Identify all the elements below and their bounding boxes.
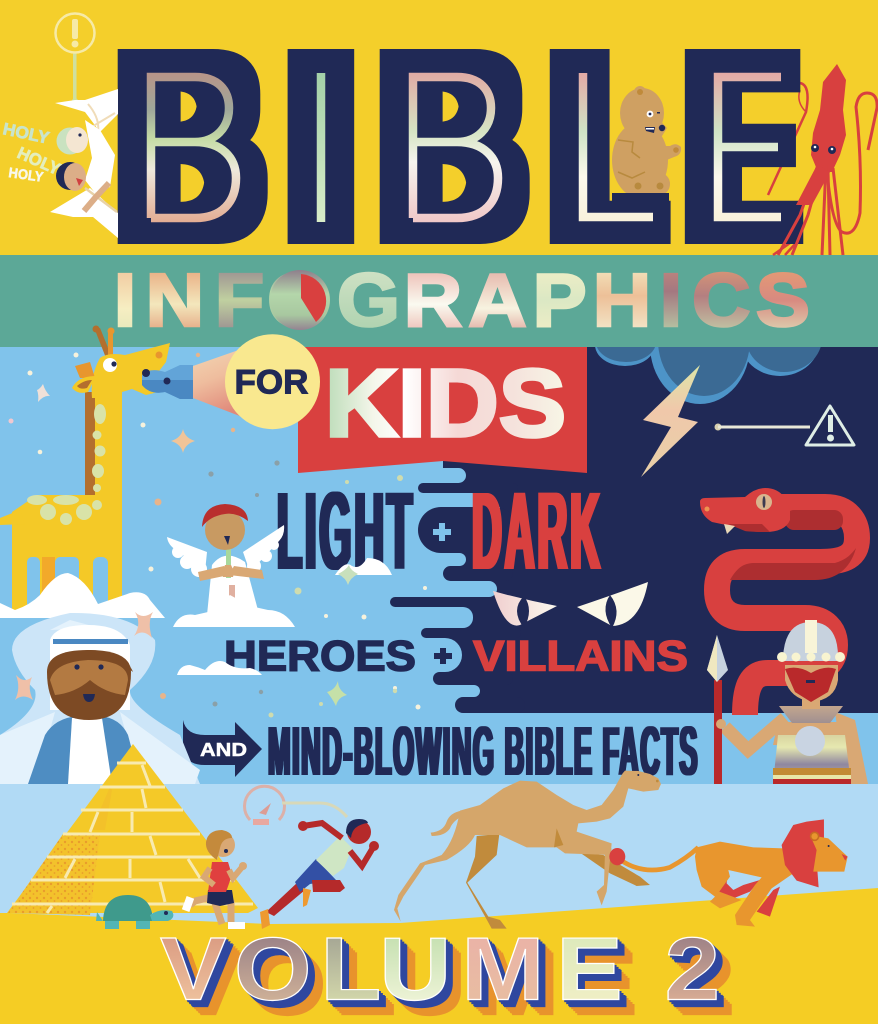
small cloud by LIGHT <box>335 558 392 575</box>
icon: bear <box>612 86 681 198</box>
panel: teal band <box>0 255 878 347</box>
panel: dark half with wavy edge <box>300 347 878 713</box>
title: INFOGRAPHICS: I <box>660 258 682 342</box>
icon: storm cloud <box>595 347 820 404</box>
icon: pie chart in the O <box>270 270 330 330</box>
icon: villain cat eyes <box>493 582 648 628</box>
icon: plus dark <box>434 648 452 664</box>
decorative gradient inline strokes of the title <box>151 73 781 222</box>
title: BIBLE: E <box>693 0 791 293</box>
text: DARK <box>472 470 603 593</box>
panel: red banner <box>298 347 587 473</box>
title: VOLUME 2: V <box>160 919 227 1019</box>
circle badge: FOR: FOR <box>234 364 308 402</box>
text: HOLY 3: HOLY <box>8 164 45 185</box>
heading: HEROES: HEROES <box>224 632 416 680</box>
icon: tentacles behind title <box>768 83 808 255</box>
arrow with AND: AND <box>200 740 247 760</box>
icon: turtle <box>96 895 173 929</box>
icon: praising angels <box>50 89 118 238</box>
title: INFOGRAPHICS: A <box>468 258 527 342</box>
icon: speedometer <box>245 786 347 825</box>
icon: squid <box>778 64 877 255</box>
arrow with AND <box>183 720 262 777</box>
cloud under angel <box>173 595 295 627</box>
title: BIBLE: L <box>557 0 658 293</box>
icon: pyramid <box>7 744 258 915</box>
text: LIGHT <box>277 470 415 593</box>
text: HOLY 1: HOLY <box>1 119 52 148</box>
title: VOLUME 2: E <box>556 919 623 1019</box>
title: INFOGRAPHICS: P <box>533 258 587 342</box>
circle badge: FOR <box>225 334 320 429</box>
title: INFOGRAPHICS: I <box>114 258 136 342</box>
text: HOLY 2: HOLY <box>14 143 64 179</box>
title: BIBLE <box>123 0 791 293</box>
icon: singing angel <box>167 504 284 625</box>
icon: camel <box>394 771 661 929</box>
small cloud by HEROES <box>177 661 262 675</box>
icon: giraffe <box>0 326 170 617</box>
icon: pen flashlight with beam <box>142 346 250 420</box>
icon: Moses with glow <box>0 613 200 784</box>
icon: sprinter <box>260 819 379 929</box>
title: INFOGRAPHICS: G <box>337 258 400 342</box>
title: INFOGRAPHICS: R <box>404 258 462 342</box>
icon: lightning bolt <box>641 365 700 477</box>
icon: exclamation circle with stem <box>56 14 94 104</box>
title: INFOGRAPHICS: N <box>146 258 204 342</box>
title: VOLUME 2: L <box>320 919 381 1019</box>
title: INFOGRAPHICS: C <box>692 258 751 342</box>
title: BIBLE: I <box>291 0 350 293</box>
title: VOLUME 2: U <box>379 919 451 1019</box>
title: VOLUME 2: O <box>234 919 312 1019</box>
icon: warning sign with line <box>714 406 854 445</box>
panel: desert ground <box>0 888 878 1024</box>
icon: lion <box>609 819 848 927</box>
panel: lower pale sky <box>0 784 878 929</box>
icon: serpent <box>700 488 857 715</box>
panel: yellow top band <box>0 0 878 256</box>
title: INFOGRAPHICS: H <box>593 258 651 342</box>
clouds over giraffe feet <box>0 573 165 618</box>
title: BIBLE: B <box>123 0 258 293</box>
panel: light sky <box>0 347 878 784</box>
icon: soldier with spear <box>707 620 868 784</box>
title: VOLUME 2 <box>160 919 720 1019</box>
title: INFOGRAPHICS: F <box>215 258 264 342</box>
title: INFOGRAPHICS: S <box>756 258 810 342</box>
title: VOLUME 2: M <box>461 919 544 1019</box>
decorative stars and dots <box>8 352 427 718</box>
heading: VILLAINS: VILLAINS <box>473 632 688 680</box>
title: VOLUME 2: 2 <box>665 919 720 1019</box>
icon: boy running <box>182 830 247 929</box>
icon: plus light <box>433 523 451 541</box>
star by LIGHT cloud <box>338 565 358 585</box>
stars near Moses <box>15 612 153 700</box>
title: KIDS: KIDS <box>325 350 566 457</box>
title: INFOGRAPHICS: O <box>267 258 330 342</box>
title: BIBLE: B <box>385 0 520 293</box>
